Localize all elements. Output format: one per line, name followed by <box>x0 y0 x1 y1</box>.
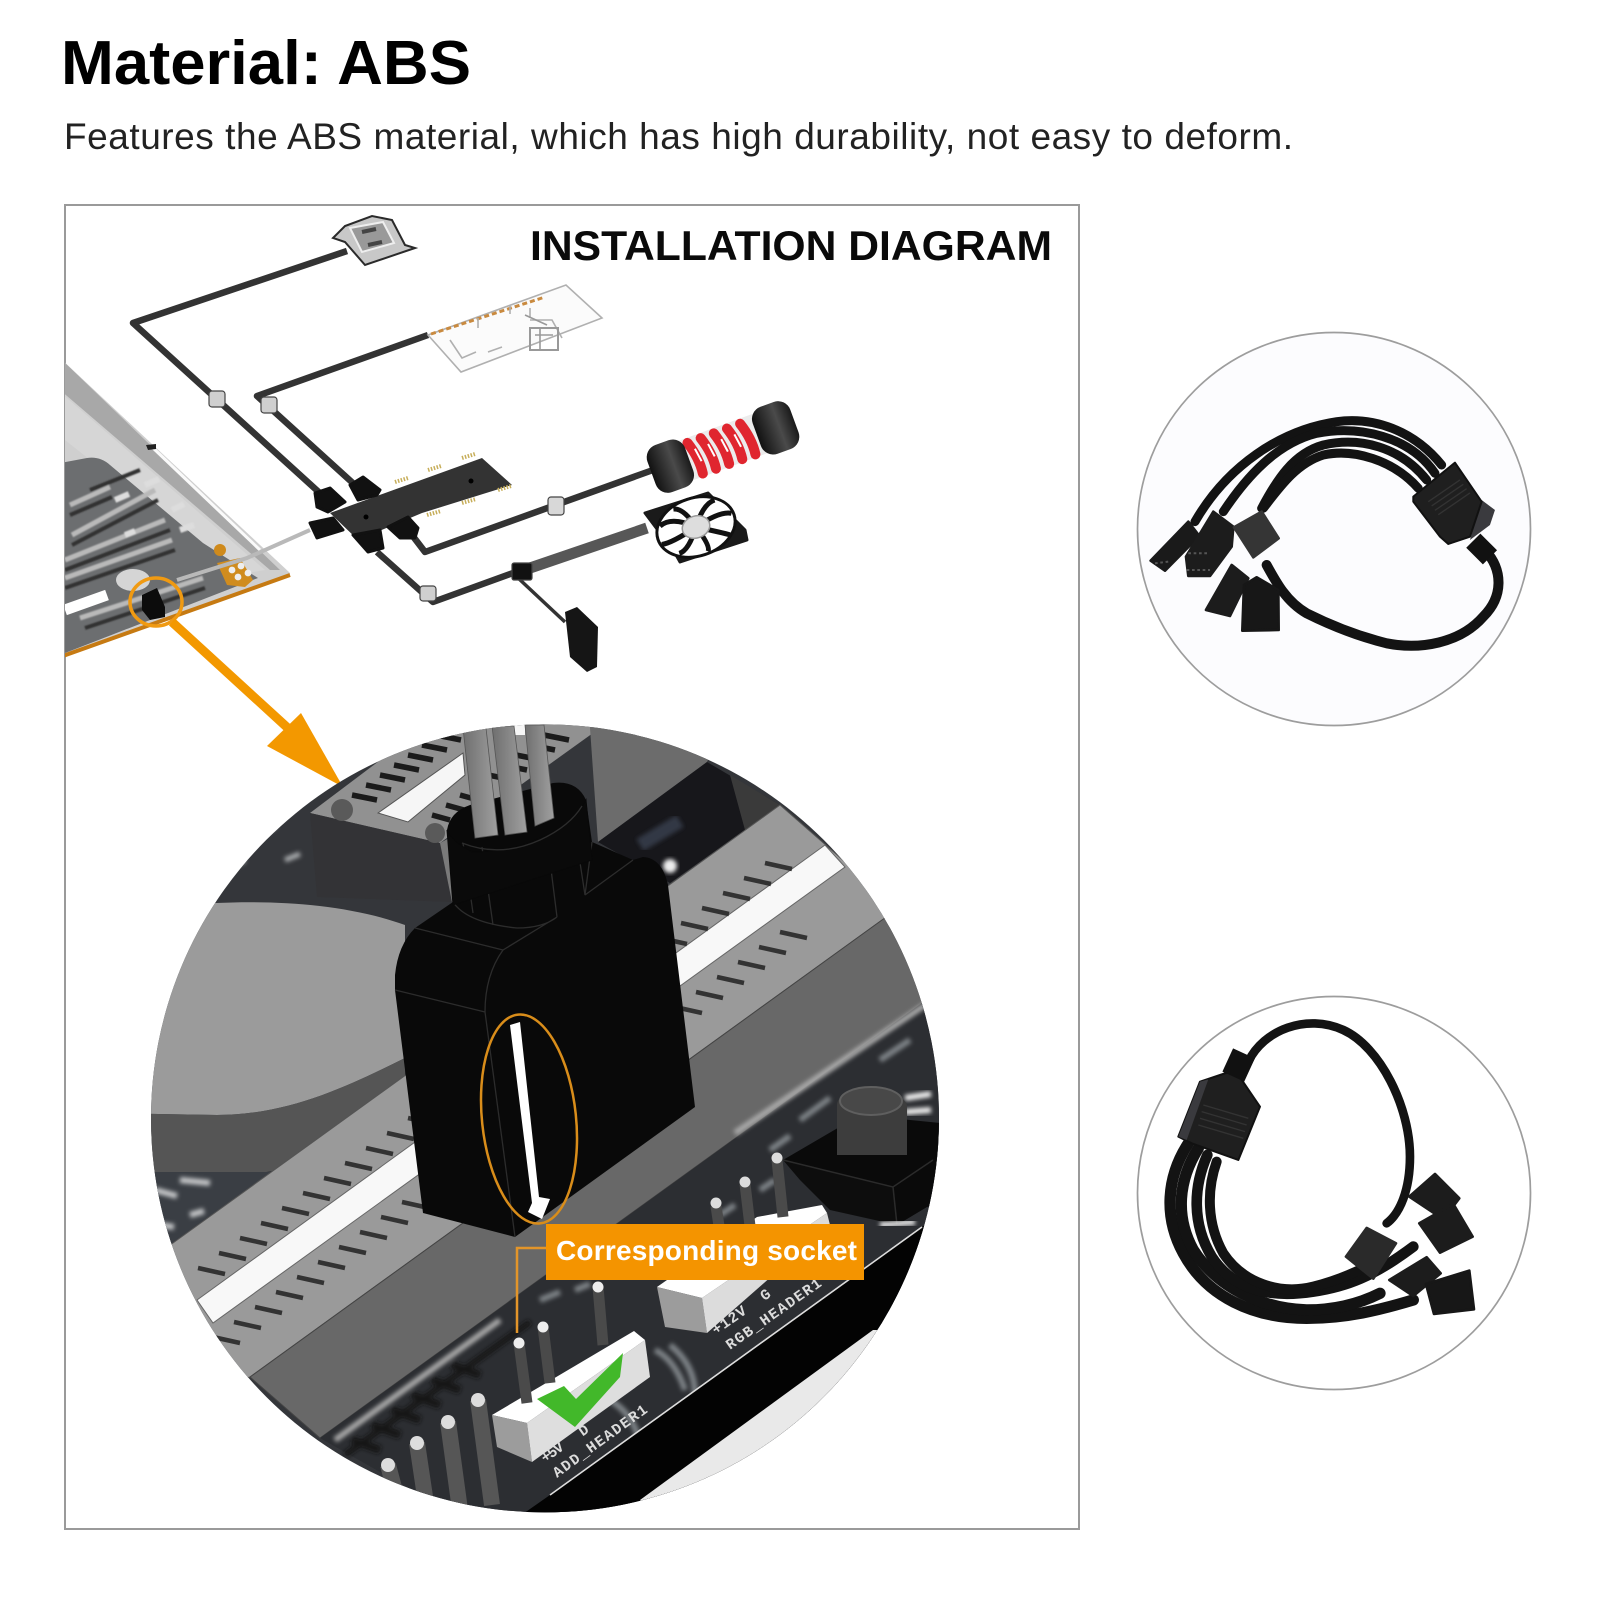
dark grey band <box>250 918 922 1438</box>
silkscreen labels: +12V G <box>709 1286 775 1339</box>
second socket <box>657 1152 830 1333</box>
collar outline <box>462 806 582 850</box>
three wires entering plug <box>463 725 554 838</box>
water block <box>333 216 415 265</box>
leader line <box>517 1248 547 1333</box>
cooling fan <box>645 487 747 567</box>
title: Material: ABS <box>61 28 471 98</box>
splitter cable <box>1170 1023 1474 1318</box>
reservoir tube <box>643 398 803 496</box>
silkscreen labels: ADD_HEADER1 <box>550 1402 651 1482</box>
subtitle text: Features the ABS material, which has high durability, not easy to deform. <box>64 116 1293 157</box>
connector on board with highlight ring <box>130 578 182 626</box>
hub board <box>310 454 512 552</box>
cable clips <box>209 391 564 601</box>
callout: corresponding socket <box>546 1224 864 1280</box>
white direction arrow <box>510 1022 550 1219</box>
panel: installation diagram <box>60 205 1079 1540</box>
dark region upper right <box>598 762 780 883</box>
silkscreen labels <box>538 1275 825 1482</box>
motherboard corner <box>60 358 290 657</box>
molex connector <box>565 607 598 672</box>
heading: installation diagram: INSTALLATION DIAGRAM <box>530 222 1052 269</box>
silkscreen labels: +5V D <box>538 1422 593 1467</box>
silkscreen labels: RGB_HEADER1 <box>723 1275 825 1354</box>
arrow: orange pointer to zoomed view <box>172 622 343 787</box>
cables to components <box>133 251 653 622</box>
speckle left of slot <box>154 1172 270 1244</box>
black strip with board edge <box>526 1225 924 1512</box>
speckled background <box>242 829 303 868</box>
black plug <box>395 783 695 1237</box>
power cable to board <box>177 530 310 580</box>
splitter cable <box>1151 421 1499 646</box>
capacitor knob and block <box>783 1086 939 1226</box>
product photo circle: cable top view <box>1138 332 1530 726</box>
graphics card water block <box>428 285 602 372</box>
icon: green check mark <box>537 1353 623 1427</box>
orange highlight ellipse <box>480 1013 578 1225</box>
disc component <box>151 902 405 1172</box>
front header pins <box>381 1393 492 1510</box>
callout: corresponding socket: Corresponding socket <box>556 1235 857 1266</box>
upper slot block <box>310 724 598 902</box>
plug collar rim <box>447 800 592 905</box>
lower circuit board area <box>320 1002 939 1512</box>
correct socket <box>492 1282 650 1462</box>
product photo circle: cable bottom view <box>1138 996 1530 1390</box>
grey wedge behind plug <box>590 727 708 842</box>
expansion slot band <box>172 804 885 1378</box>
zoomed connector circle <box>151 724 939 1512</box>
